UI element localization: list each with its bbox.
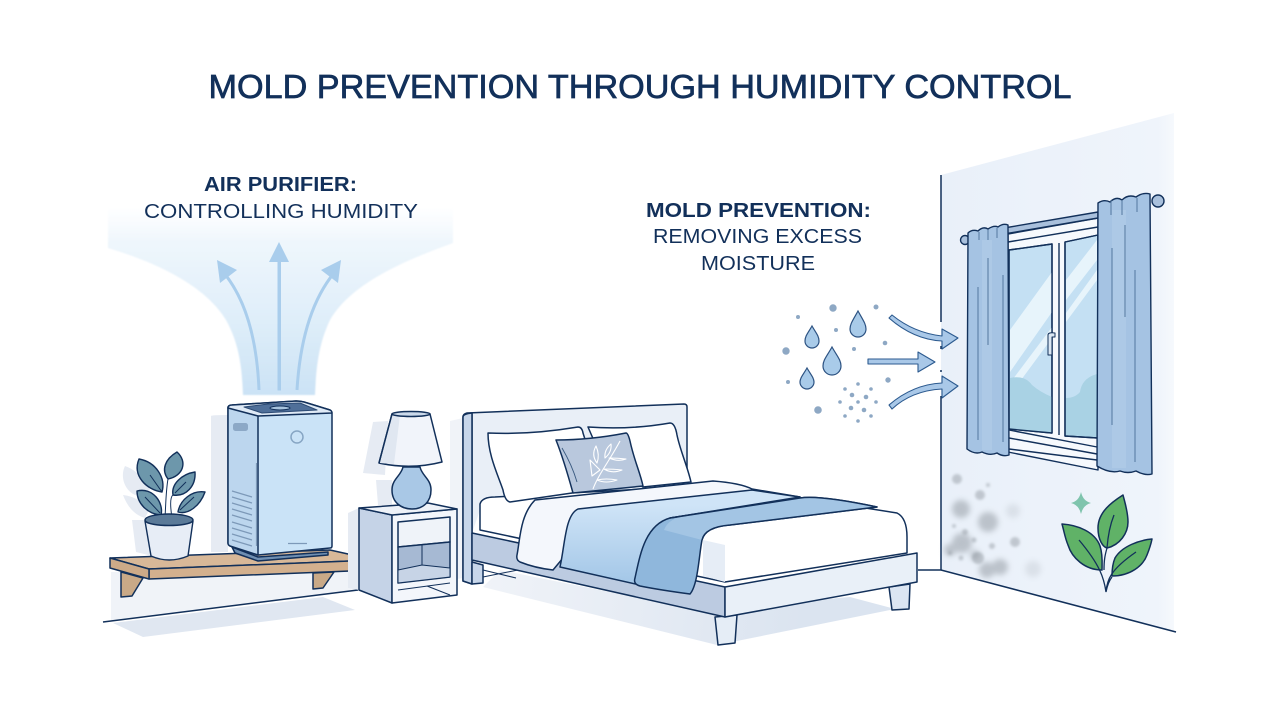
blue blanket xyxy=(560,490,800,585)
icon: table lamp xyxy=(379,412,442,509)
decorative pillow xyxy=(556,433,643,493)
icon: potted plant xyxy=(123,452,205,560)
air purifier xyxy=(228,401,332,561)
headboard xyxy=(463,404,687,584)
handle xyxy=(1048,333,1055,355)
bed frame xyxy=(472,533,725,617)
blanket runner xyxy=(635,497,877,594)
left curtain xyxy=(967,224,1009,456)
right curtain xyxy=(1097,193,1152,475)
mattress xyxy=(480,485,907,582)
curtain highlights xyxy=(982,210,1126,468)
label: mold prevention: MOISTURE xyxy=(701,253,815,275)
curtain folds xyxy=(978,198,1137,462)
white sheet xyxy=(517,481,800,570)
bed legs xyxy=(472,562,483,584)
air flow arrows xyxy=(217,242,341,390)
mold patches xyxy=(944,474,1041,578)
label: mold prevention xyxy=(646,200,871,275)
clouds xyxy=(1010,377,1052,433)
wall shadows and floor line xyxy=(103,415,358,637)
window frame xyxy=(1008,218,1098,470)
lamp and nightstand shadow xyxy=(348,421,392,590)
window xyxy=(960,193,1164,475)
label: mold prevention: REMOVING EXCESS xyxy=(653,226,862,248)
arrows toward window xyxy=(868,315,958,409)
bed xyxy=(463,404,917,645)
pillows xyxy=(588,423,691,487)
label: air purifier: CONTROLLING HUMIDITY xyxy=(144,200,418,223)
curtain rod xyxy=(1004,212,1098,234)
right wall xyxy=(941,113,1174,632)
purifier details xyxy=(232,423,307,546)
title: MOLD PREVENTION THROUGH HUMIDITY CONTROL xyxy=(208,68,1072,105)
air flow plume xyxy=(108,205,453,395)
shelf xyxy=(110,550,375,597)
nightstand xyxy=(359,503,457,603)
icon: green leaves xyxy=(1062,495,1152,592)
bed floor shadow and headboard shadow xyxy=(450,418,895,645)
icon: sparkle xyxy=(1071,492,1091,514)
label: air purifier xyxy=(144,174,418,223)
glass reflections xyxy=(1010,240,1097,395)
glass xyxy=(1009,244,1052,433)
wall edges xyxy=(918,175,1176,632)
label: mold prevention: MOLD PREVENTION: xyxy=(646,200,871,222)
label: air purifier: AIR PURIFIER: xyxy=(204,174,357,196)
sill xyxy=(1009,430,1097,460)
icon: moisture droplets and particles xyxy=(782,304,891,423)
